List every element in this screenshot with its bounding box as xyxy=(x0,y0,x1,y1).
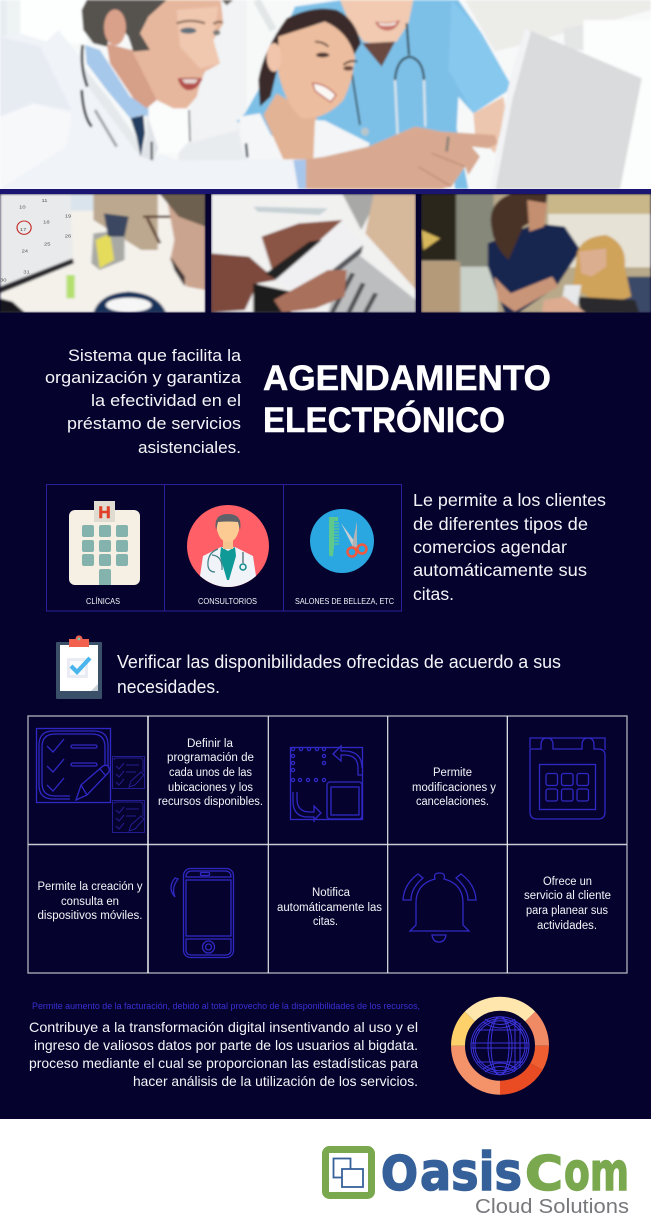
calendar dates xyxy=(0,198,71,283)
logo wordmark: asis xyxy=(420,1142,522,1203)
text: customer service: Ofrece un xyxy=(543,876,592,888)
calendar dates: 31 xyxy=(23,270,30,275)
text: notifications: automáticamente las xyxy=(277,902,382,914)
title: ELECTRÓNICO xyxy=(263,400,505,440)
label: consulting rooms: CONSULTORIOS xyxy=(198,596,257,606)
text: verify availability: necesidades. xyxy=(117,676,220,697)
intro text block: préstamo de servicios xyxy=(67,414,241,433)
text: notifications xyxy=(277,887,382,928)
text: clients schedule: de diferentes tipos de xyxy=(413,514,588,534)
male doctor xyxy=(20,32,68,44)
calendar dates: 11 xyxy=(42,198,48,204)
icon: move and reschedule xyxy=(290,746,362,822)
panel: features grid xyxy=(28,716,627,973)
logo mark xyxy=(326,1150,372,1196)
pointing hand xyxy=(293,159,311,189)
title: AGENDAMIENTO xyxy=(263,359,551,398)
text: digital transformation: ingreso de valiosos datos por parte de los usuarios al bigdata. xyxy=(34,1037,418,1053)
text: mobile use: consulta en xyxy=(61,896,119,908)
icon: bell xyxy=(403,873,476,942)
text: define schedule: ubicaciones y los xyxy=(168,782,253,794)
text: verify availability xyxy=(117,651,561,697)
photo strip xyxy=(0,189,651,313)
text: customer service: actividades. xyxy=(537,920,597,932)
text: define schedule: programación de xyxy=(167,752,254,764)
logo tagline: Cloud Solutions xyxy=(475,1196,629,1218)
intro text block xyxy=(45,346,242,457)
intro text block: asistenciales. xyxy=(138,438,241,457)
intro text block: la efectividad en el xyxy=(91,391,241,410)
text: customer service xyxy=(524,876,611,932)
text: clients schedule: automáticamente sus xyxy=(413,560,587,580)
icon: globe with ring xyxy=(458,1004,542,1088)
intro text block: Sistema que facilita la xyxy=(68,346,242,365)
text: digital transformation: proceso mediante el cual se proporcionan las estadísticas para xyxy=(29,1055,418,1071)
text: customer service: servicio al cliente xyxy=(524,890,611,902)
text: changes and cancellations: cancelaciones. xyxy=(416,796,489,808)
text: mobile use: Permite la creación y xyxy=(38,881,143,893)
text: billing note: Permite aumento de la facturación, debido al total provecho de la disponibilidades de los recursos, xyxy=(32,1001,420,1011)
text: clients schedule: Le permite a los clientes xyxy=(413,490,606,510)
text: define schedule: cada unos de las xyxy=(169,767,252,779)
intro text block: organización y garantiza xyxy=(45,368,242,387)
nurse xyxy=(237,0,510,189)
nurse's stethoscope and woman xyxy=(263,93,317,159)
calendar dates: 24 xyxy=(22,249,28,254)
icon: hospital xyxy=(69,501,140,585)
label: beauty salons: SALONES DE BELLEZA, ETC xyxy=(295,596,394,606)
calendar dates: 30 xyxy=(0,278,7,283)
icon: smartphone xyxy=(171,868,234,958)
text: clients schedule xyxy=(413,490,606,604)
text: mobile use xyxy=(38,881,143,922)
text: changes and cancellations xyxy=(412,767,496,808)
text: define schedule: recursos disponibles. xyxy=(158,796,263,808)
text: digital transformation xyxy=(29,1019,418,1089)
logo: OasisCom xyxy=(326,1142,629,1203)
calendar dates: 25 xyxy=(44,242,51,247)
text: digital transformation: hacer análisis de la utilización de los servicios. xyxy=(133,1073,418,1089)
icon: doctor xyxy=(187,505,269,587)
calendar dates: 17 xyxy=(20,227,26,233)
photo: hands holding a smartphone xyxy=(211,194,416,313)
icon: calendar xyxy=(530,738,605,819)
text: notifications: Notifica xyxy=(312,887,351,899)
logo wordmark: O xyxy=(381,1147,418,1202)
text: verify availability: Verificar las disponibilidades ofrecidas de acuerdo a sus xyxy=(117,651,561,672)
icon: clipboard xyxy=(56,635,102,699)
calendar dates: 18 xyxy=(43,220,50,225)
calendar dates: 26 xyxy=(65,234,71,239)
text: define schedule xyxy=(158,738,263,808)
logo wordmark xyxy=(381,1142,629,1203)
text: digital transformation: Contribuye a la transformación digital insentivando al uso y el xyxy=(29,1019,418,1035)
text: clients schedule: citas. xyxy=(413,584,454,604)
calendar dates: 10 xyxy=(19,205,26,210)
label: clinics: CLÍNICAS xyxy=(86,596,120,606)
title xyxy=(263,359,551,440)
icon: checklist with pencil xyxy=(36,728,144,832)
dark navy background panel xyxy=(0,189,651,1119)
text: clients schedule: comercios agendar xyxy=(413,537,567,557)
logo wordmark: C xyxy=(525,1147,563,1202)
photo: medical team at a laptop xyxy=(0,0,651,189)
text: changes and cancellations: modificaciones y xyxy=(412,782,496,794)
photo: hair salon xyxy=(421,194,651,313)
text: notifications: citas. xyxy=(313,916,338,928)
text: define schedule: Definir la xyxy=(187,738,234,750)
photo: desk calendar and person xyxy=(0,194,206,313)
panel: business types xyxy=(46,484,402,611)
icon: hospital: H xyxy=(98,503,111,522)
text: customer service: para planear sus xyxy=(526,905,608,917)
icon: comb and scissors xyxy=(310,509,374,573)
calendar dates: 19 xyxy=(65,214,71,219)
text: changes and cancellations: Permite xyxy=(433,767,472,779)
text: mobile use: dispositivos móviles. xyxy=(38,910,142,922)
